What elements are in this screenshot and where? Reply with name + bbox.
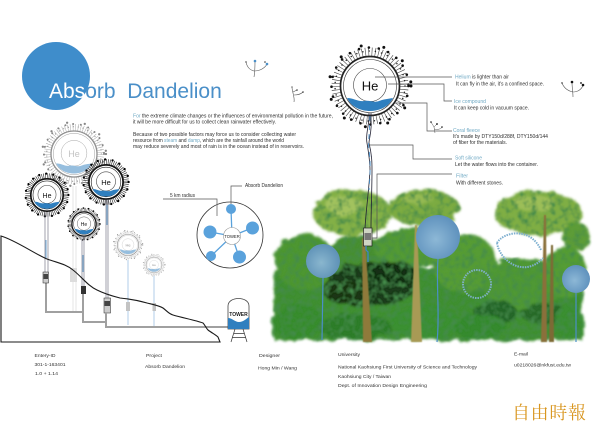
- footer: entry id: [34, 353, 66, 377]
- filter box on main stem: [364, 228, 372, 262]
- watermark: 自由時報: [512, 402, 586, 423]
- footer: university: Kaohsiung City / Taiwan: [338, 374, 391, 380]
- label: absorb dandelion: Absorb Dandelion: [245, 183, 283, 189]
- faded dandelion small: He: [125, 242, 131, 248]
- annotation: filter: [456, 174, 503, 186]
- footer: project: Absorb Dandelion: [145, 364, 185, 370]
- footer: e-mail: E-mail: [514, 352, 528, 358]
- icon: small dandelion seed top: [245, 60, 268, 77]
- footer: designer: Hong Min / Wang: [258, 366, 297, 372]
- footer: university: Dept. of Innovation Design Engineering: [338, 383, 427, 389]
- balloon stems: [322, 259, 576, 342]
- footer: university: University: [338, 352, 361, 358]
- tower hub: [224, 228, 240, 244]
- faded dandelion small: [113, 230, 143, 325]
- intro paragraph: may reduce severely and most of rain is in the ocean instead of in reservoirs.: [133, 144, 304, 150]
- footer: e-mail: [514, 352, 571, 368]
- hill outline: [1, 236, 220, 342]
- label: 5 km radius: [163, 193, 217, 216]
- intro paragraph: Because of two possible factors may force us to consider collecting water: [133, 132, 296, 138]
- footer: designer: Designer: [259, 353, 280, 359]
- annotation: filter: Filter: [456, 174, 468, 180]
- intro paragraph: For the extreme climate changes or the influences of environmental pollution in the future,: [133, 114, 333, 120]
- annotation: coral fleece: It's made by DTY150d/288f, DTY150d/144: [453, 134, 548, 140]
- radius diagram: [197, 202, 263, 268]
- pipe network: [46, 283, 228, 327]
- annotation: soft silicone: [455, 156, 538, 168]
- spokes: [210, 209, 252, 257]
- annotation: soft silicone: Soft silicone: [455, 156, 482, 162]
- annotation: soft silicone: Let the water flows into the container.: [455, 162, 538, 168]
- dandelion right: He: [101, 178, 111, 187]
- intro paragraph: it will be more difficult for us to collect clean rainwater effectively.: [133, 120, 276, 126]
- main stem: [365, 113, 372, 228]
- footer: entry id: 301-1-163401: [34, 362, 66, 368]
- dandelion middle: He: [81, 222, 87, 228]
- water balloons: [306, 215, 590, 298]
- radius diagram: TOWER: [224, 234, 240, 239]
- annotation: ice compound: Ice compound: [454, 99, 486, 105]
- leader line: soft silicone: [369, 145, 452, 159]
- icon: small dandelion seed right: [561, 81, 584, 97]
- label: absorb dandelion: [231, 183, 283, 204]
- annotation: helium: It can fly in the air, it's a confined space.: [456, 82, 544, 88]
- footer: entry id: Entery-ID: [34, 353, 56, 359]
- footer: designer: [258, 353, 297, 372]
- title: Absorb Dandelion: [22, 42, 222, 110]
- intro paragraph: resource from steam and damp, which are the rainfall around the world: [133, 138, 284, 144]
- faded large dandelion: He: [68, 149, 80, 159]
- icon: small dandelion seed middle: [291, 86, 304, 102]
- footer: university: National Kaohsiung First University of Science and Technology: [338, 364, 478, 370]
- annotation: helium: [455, 74, 544, 88]
- tree trunks: [362, 215, 554, 342]
- faded large dandelion: [42, 122, 106, 312]
- forest illustration: [272, 190, 590, 342]
- icon: coral fleece seed: [430, 121, 443, 133]
- faded dandelion smallest: [143, 254, 165, 327]
- water tower: TOWER: [229, 312, 248, 318]
- annotation: helium: Helium is lighter than air: [455, 74, 509, 80]
- main dandelion: [329, 45, 411, 228]
- water tower: [228, 298, 249, 342]
- faded dandelion smallest: He: [152, 263, 156, 267]
- sky gap between crowns: [499, 241, 527, 257]
- nodes: [204, 204, 259, 264]
- label: 5 km radius: 5 km radius: [170, 193, 195, 199]
- annotation: ice compound: [454, 99, 529, 112]
- leader line: helium: [375, 76, 452, 78]
- leader line: filter: [372, 174, 452, 238]
- title: Absorb Dandelion: Absorb Dandelion: [49, 80, 222, 103]
- main dandelion: He: [362, 78, 378, 94]
- annotation: coral fleece: [453, 128, 548, 146]
- dandelion middle: [68, 208, 100, 322]
- footer: project: Project: [146, 353, 163, 359]
- leader line: ice compound: [388, 84, 452, 101]
- footer: entry id: 1.0 + 1.14: [35, 371, 58, 377]
- annotation: coral fleece: Coral fleece: [453, 128, 480, 134]
- intro paragraph: [133, 114, 333, 150]
- annotation: coral fleece: of fiber for the materials.: [453, 140, 507, 146]
- annotation: filter: With different stones.: [456, 180, 503, 186]
- footer: university: [338, 352, 478, 389]
- annotation: ice compound: It can keep cold in vacuum space.: [454, 106, 529, 112]
- dandelion left: He: [43, 193, 52, 200]
- leader line: coral fleece: [396, 103, 452, 131]
- footer: e-mail: u0218026@nkfust.edu.tw: [514, 362, 571, 368]
- footer: project: [145, 353, 185, 370]
- dandelion right: [83, 159, 129, 327]
- dandelion left: [26, 174, 68, 283]
